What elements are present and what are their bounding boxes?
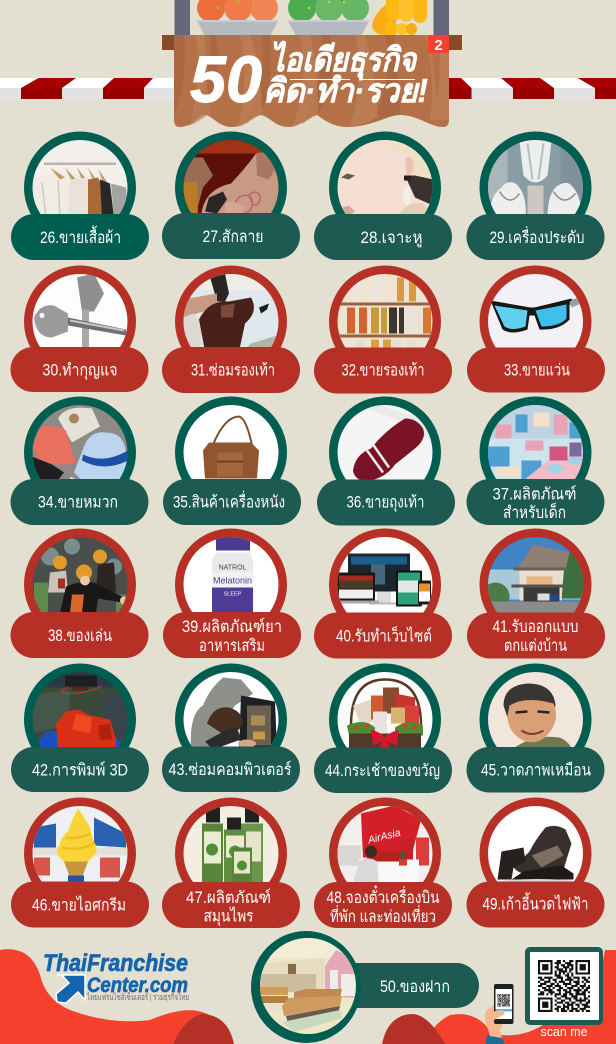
photo: necklaces on display <box>488 140 583 214</box>
label pill: 26.ขายเสื้อผ้า <box>40 225 121 247</box>
photo: ice cream cone <box>32 806 128 902</box>
card 41: house design <box>467 528 605 658</box>
photo: sunglasses <box>488 274 583 348</box>
label pill: 27.สักลาย <box>202 228 264 246</box>
label pill: 38.ของเล่น <box>48 627 112 645</box>
thumb <box>490 1010 505 1020</box>
card 32: shoes <box>314 266 452 394</box>
label pill <box>314 882 452 928</box>
card 48: travel booking <box>314 798 452 928</box>
photo: melatonin bottle: Melatonin <box>213 576 252 586</box>
photo: caricature portrait <box>488 672 583 747</box>
label pill: 29.เครื่องประดับ <box>490 226 584 247</box>
market stall header <box>162 0 462 127</box>
ring <box>175 266 287 378</box>
footer red blob left <box>0 949 234 1044</box>
card 42: 3D printing <box>11 664 149 792</box>
photo: AirAsia counter: AirAsia <box>366 827 402 847</box>
photo: melatonin bottle <box>184 537 278 612</box>
label pill <box>466 479 604 525</box>
ring <box>175 528 287 640</box>
ring <box>24 266 136 378</box>
logo tagline: ไทยแฟรนไชส์เซ็นเตอร์ | รวมธุรกิจไทย <box>86 991 189 1003</box>
scan me: scan me <box>540 1024 588 1039</box>
footer red blob right <box>425 950 616 1044</box>
label pill: 32.ขายรองเท้า <box>342 362 424 380</box>
card 49: massage chair <box>466 798 604 928</box>
ring <box>480 132 592 244</box>
ring <box>175 132 287 244</box>
icon: logo arrow <box>56 975 85 1003</box>
QR code <box>538 961 590 1011</box>
ring <box>251 931 361 1043</box>
label pill: 43.ซ่อมคอมพิวเตอร์ <box>168 760 292 779</box>
card 44: gift basket <box>314 664 452 793</box>
photo: sock <box>338 405 432 480</box>
photo: computer technician <box>184 672 278 746</box>
awning cloth <box>174 35 449 127</box>
label pill: สำหรับเด็ก <box>503 502 566 522</box>
photo: melatonin bottle: NATROL <box>219 564 247 572</box>
photo: massage chair <box>488 806 584 902</box>
ring <box>24 664 136 776</box>
card 40: website service <box>314 528 452 658</box>
photo: modern house <box>488 537 583 612</box>
ring <box>329 528 441 640</box>
label pill: 31.ซ่อมรองเท้า <box>191 362 275 380</box>
logo: ThaiFranchiseCenter.com <box>43 950 189 1003</box>
icon: phone scanning QR held in hand <box>485 984 514 1044</box>
label pill <box>340 963 479 1008</box>
card 37: kids products <box>466 396 604 525</box>
label pill: 42.การพิมพ์ 3D <box>32 760 128 780</box>
label pill: อาหารเสริม <box>199 637 265 655</box>
label pill: 41.รับออกแบบ <box>492 618 578 636</box>
title <box>190 40 428 116</box>
QR code panel <box>525 947 603 1039</box>
logo wordmark: ThaiFranchise <box>43 950 188 977</box>
footer dark blob right <box>382 1014 445 1044</box>
ring <box>175 664 287 776</box>
card 43: computer repair <box>162 664 300 792</box>
label pill: ที่พัก และท่องเที่ยว <box>330 905 436 926</box>
icon: bowl of oranges <box>197 0 278 36</box>
ring <box>24 798 136 910</box>
label pill: 36.ขายถุงเท้า <box>346 494 424 512</box>
label pill <box>162 882 300 928</box>
card 45: caricature <box>466 664 604 792</box>
logo wordmark: Center.com <box>87 974 188 997</box>
photo: melatonin bottle: SLEEP <box>224 592 242 598</box>
photo: 3D printer <box>32 672 128 747</box>
icon: bowl of limes <box>288 0 369 36</box>
label pill: 49.เก้าอี้นวดไฟฟ้า <box>482 892 588 914</box>
label pill: 28.เจาะหู <box>360 229 423 248</box>
card 28: ear piercing <box>314 132 452 260</box>
sleeve <box>486 1034 505 1044</box>
photo: responsive devices <box>338 537 432 612</box>
ring <box>24 528 136 640</box>
ring <box>329 396 441 508</box>
photo: hats <box>32 405 128 479</box>
photo: leather bag <box>184 405 278 479</box>
badge: 2: 2 <box>434 37 443 54</box>
card 27: tattoo <box>162 132 300 259</box>
ring <box>329 798 441 910</box>
ring <box>24 396 136 508</box>
card 50: souvenirs <box>251 931 479 1043</box>
title: คิด·ทำ·รวย! <box>263 72 428 109</box>
striped awning band right <box>449 78 616 99</box>
card 35: leather bag <box>163 396 301 525</box>
label pill: สมุนไพร <box>204 906 254 926</box>
label pill: 39.ผลิตภัณฑ์ยา <box>182 617 282 636</box>
photo: kids store <box>488 405 583 479</box>
label pill: 46.ขายไอศกรีม <box>32 896 126 914</box>
ring <box>175 798 287 910</box>
photo: herbal shampoo bottles <box>183 806 279 902</box>
ring <box>480 266 592 378</box>
ring <box>24 132 136 244</box>
title: 50 <box>190 42 262 116</box>
title: ไอเดียธุรกิจ <box>270 40 417 81</box>
label pill: ตกแต่งบ้าน <box>504 637 567 655</box>
card 30: keys <box>10 266 148 392</box>
ring <box>480 396 592 508</box>
label pill <box>163 612 301 658</box>
card 47: herbal products <box>162 798 300 928</box>
label pill: 50.ของฝาก <box>380 978 450 996</box>
ring <box>480 664 592 776</box>
photo: keys <box>32 274 128 347</box>
photo: souvenir shop <box>260 938 356 1034</box>
ring <box>480 528 592 640</box>
hand <box>485 1002 512 1038</box>
ring <box>480 798 592 910</box>
card 39: supplements <box>163 528 301 658</box>
label pill <box>467 612 605 658</box>
photo: shoe repair <box>184 274 278 347</box>
label pill: 47.ผลิตภัณฑ์ <box>186 888 271 907</box>
label pill: 35.สินค้าเครื่องหนัง <box>173 490 285 512</box>
label pill: 37.ผลิตภัณฑ์ <box>492 484 576 504</box>
label pill: 48.จองตั๋วเครื่องบิน <box>326 884 440 907</box>
ring <box>175 396 287 508</box>
logo wordmark <box>43 950 188 997</box>
label pill: 44.กระเช้าของขวัญ <box>325 762 440 780</box>
photo: shoe shelves <box>338 274 432 348</box>
ring <box>329 266 441 378</box>
footer dark blob left <box>173 1014 234 1044</box>
badge: 2 <box>428 35 449 54</box>
phone <box>494 984 514 1024</box>
striped awning band left <box>0 78 175 99</box>
photo: gift basket <box>338 672 432 748</box>
photo: ear piercing <box>338 140 432 214</box>
photo: action figures <box>32 537 128 612</box>
awning beam <box>162 35 462 50</box>
card 29: jewellery <box>466 132 604 260</box>
ring <box>329 132 441 244</box>
label pill: 33.ขายแว่น <box>504 362 570 380</box>
label pill: 45.วาดภาพเหมือน <box>481 762 591 780</box>
stall posts <box>174 0 449 36</box>
label pill: 30.ทำกุญแจ <box>42 362 118 380</box>
card 26: clothes <box>11 132 149 260</box>
card 38: toys <box>10 528 148 658</box>
card 33: sunglasses <box>467 266 605 392</box>
icon: bananas <box>372 0 427 35</box>
card 31: shoe repair <box>162 266 300 393</box>
card 36: sock <box>317 396 455 526</box>
photo: tattoo artist <box>184 140 278 213</box>
card 34: hats <box>10 396 148 525</box>
ring <box>329 664 441 776</box>
photo: clothing rail <box>32 140 128 214</box>
label pill: 34.ขายหมวก <box>38 494 118 512</box>
label pill: 40.รับทำเว็บไซต์ <box>336 626 432 646</box>
card 46: ice cream <box>11 798 149 928</box>
